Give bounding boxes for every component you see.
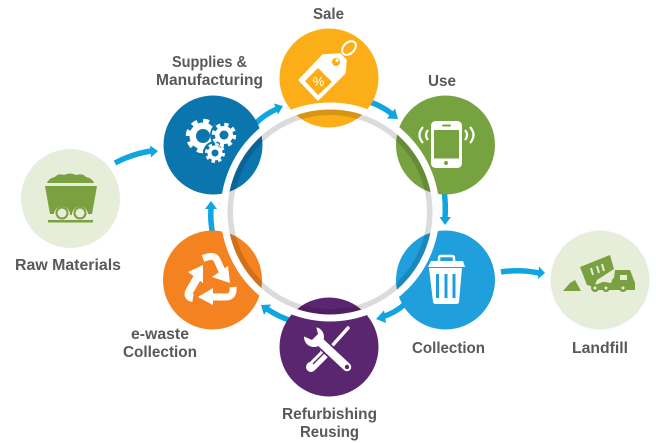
stage: collection bbox=[396, 230, 495, 357]
label: supplies and manufacturing: Supplies & bbox=[172, 54, 247, 71]
label: refurbishing and reusing: Reusing bbox=[300, 424, 359, 441]
arrow: refurbishing to e-waste bbox=[261, 304, 292, 321]
arrow: e-waste to supplies bbox=[205, 201, 217, 235]
icon: price tag: % bbox=[313, 74, 325, 89]
icon: dump truck bbox=[563, 255, 635, 292]
label: e-waste collection bbox=[123, 326, 197, 361]
icon: trash can bbox=[428, 256, 465, 304]
arrow: supplies to sale bbox=[255, 104, 283, 124]
stage: refurbishing and reusing bbox=[280, 298, 378, 441]
stage: e-waste collection bbox=[123, 230, 262, 361]
icon: gears bbox=[188, 121, 238, 165]
stage: use bbox=[396, 73, 495, 194]
stage: supplies and manufacturing bbox=[156, 54, 263, 194]
icon: recycling arrows bbox=[188, 257, 233, 305]
label: collection: Collection bbox=[412, 340, 485, 357]
icon: wrench and screwdriver bbox=[296, 320, 349, 369]
label: supplies and manufacturing bbox=[156, 54, 263, 89]
label: refurbishing and reusing bbox=[282, 406, 377, 441]
stage: sale bbox=[280, 6, 378, 128]
arrow: use to collection bbox=[440, 190, 451, 225]
icon: smartphone bbox=[420, 121, 474, 168]
arrow: raw materials to supplies bbox=[115, 146, 158, 163]
arrow: sale to use bbox=[370, 102, 398, 119]
label: sale: Sale bbox=[313, 6, 344, 23]
icon: mine cart bbox=[45, 174, 97, 222]
label: e-waste collection: e-waste bbox=[131, 326, 189, 343]
arrow: collection to refurbishing bbox=[376, 304, 405, 323]
label: e-waste collection: Collection bbox=[123, 344, 197, 361]
label: supplies and manufacturing: Manufacturing bbox=[156, 72, 263, 89]
label: landfill: Landfill bbox=[572, 340, 628, 357]
arrow: collection to landfill bbox=[501, 266, 545, 279]
label: use: Use bbox=[428, 73, 456, 90]
arrows between stages bbox=[115, 102, 545, 323]
label: refurbishing and reusing: Refurbishing bbox=[282, 406, 377, 423]
stage: landfill bbox=[550, 230, 650, 357]
stage: raw materials bbox=[15, 149, 121, 274]
central ring bbox=[224, 106, 436, 318]
label: raw materials: Raw Materials bbox=[15, 257, 121, 274]
